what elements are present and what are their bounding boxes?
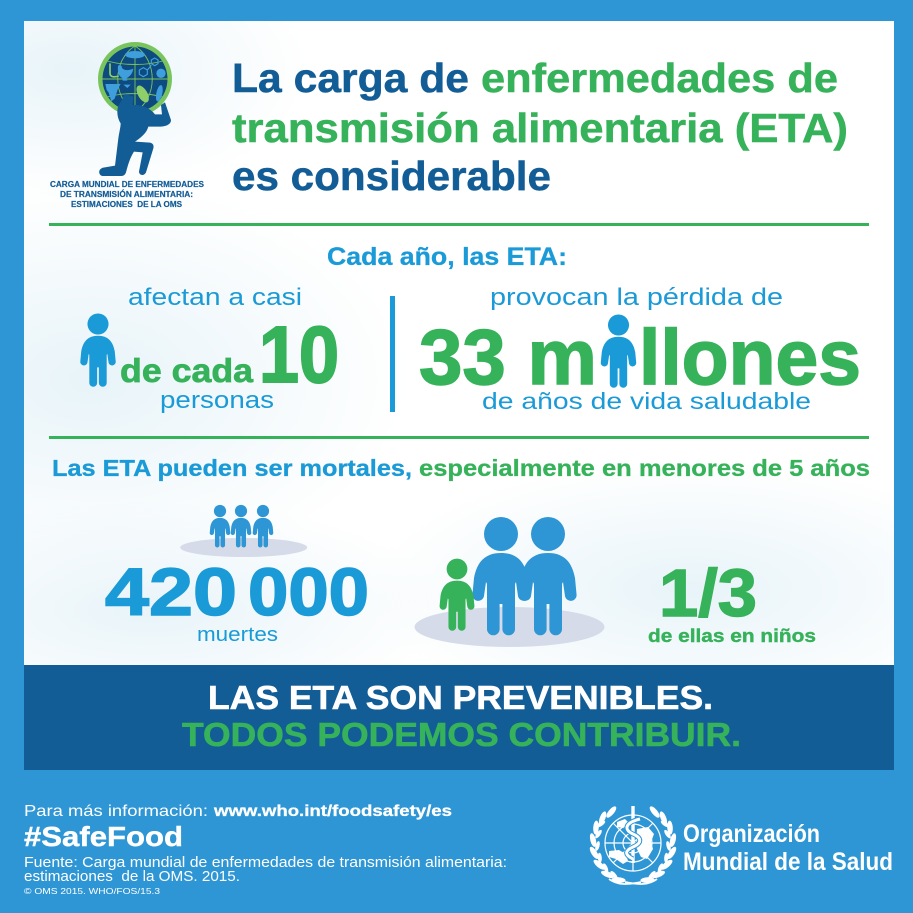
stat: one third in children: de ellas en niños: [648, 626, 816, 646]
WHO name: Mundial de la Salud: [683, 848, 893, 876]
stat: 1 in 10 people: [80, 284, 339, 414]
title: es considerable: [232, 153, 551, 199]
icon: family with child highlighted: [414, 517, 604, 647]
stat: 420 000 deaths: 000: [248, 555, 369, 630]
WHO logo: [588, 805, 893, 884]
stat: 420 000 deaths: [105, 505, 369, 646]
stat: 420 000 deaths: muertes: [197, 624, 278, 646]
heading: mortality: especialmente en menores de 5 años: [419, 455, 870, 481]
title: enfermedades de: [481, 55, 838, 101]
heading: mortality: [52, 455, 870, 481]
stat: 420 000 deaths: 420: [105, 555, 237, 630]
banner: preventable: [24, 665, 894, 770]
logo caption: CARGA MUNDIAL DE ENFERMEDADES: [50, 180, 205, 189]
stat: 33 million healthy life years: 33 m: [419, 313, 597, 401]
WHO name: Organización: [683, 820, 820, 848]
footer text: estimaciones de la OMS. 2015.: [24, 869, 240, 885]
stat: 1 in 10 people: personas: [160, 387, 274, 414]
banner: preventable: LAS ETA SON PREVENIBLES.: [208, 679, 713, 716]
stat: one third in children: [648, 556, 816, 646]
stat: 1 in 10 people: 10: [259, 310, 339, 399]
footer text: #SafeFood: [24, 821, 183, 852]
title: transmisión alimentaria (ETA): [232, 105, 848, 151]
subheading: each year: Cada año, las ETA:: [327, 243, 567, 271]
stat: 1 in 10 people: de cada: [120, 352, 254, 389]
logo caption: ESTIMACIONES DE LA OMS: [71, 200, 183, 209]
icon: WHO emblem: [588, 805, 678, 884]
stat: 33 million healthy life years: de años de vida saludable: [482, 388, 811, 414]
icon: person: [80, 313, 116, 387]
stat: 33 million healthy life years: llones: [639, 313, 861, 401]
footer text: Fuente: Carga mundial de enfermedades de transmisión alimentaria:: [24, 855, 507, 871]
atlas figure: [99, 94, 171, 176]
logo caption: [50, 180, 205, 209]
footer text: Para más información:: [24, 803, 208, 820]
stat: 1 in 10 people: afectan a casi: [128, 284, 302, 311]
stat: one third in children: 1/3: [659, 556, 757, 631]
icon: person as letter i: [601, 314, 636, 388]
WHO name: [683, 820, 893, 876]
globe: [98, 42, 172, 116]
footer text: www.who.int/foodsafety/es: [213, 803, 452, 820]
title: La carga de: [232, 55, 469, 101]
stat: 33 million healthy life years: provocan la pérdida de: [490, 284, 783, 311]
icon: atlas carrying globe logo: [50, 42, 205, 209]
icon: three people: [180, 505, 307, 557]
stat: 33 million healthy life years: [419, 284, 861, 414]
footer text: © OMS 2015. WHO/FOS/15.3: [24, 886, 160, 896]
banner: preventable: TODOS PODEMOS CONTRIBUIR.: [182, 716, 741, 753]
title: [232, 55, 848, 199]
logo caption: DE TRANSMISIÓN ALIMENTARIA:: [60, 190, 193, 199]
heading: mortality: Las ETA pueden ser mortales,: [52, 455, 412, 481]
main white panel: [24, 21, 894, 665]
footer text: [24, 803, 507, 896]
